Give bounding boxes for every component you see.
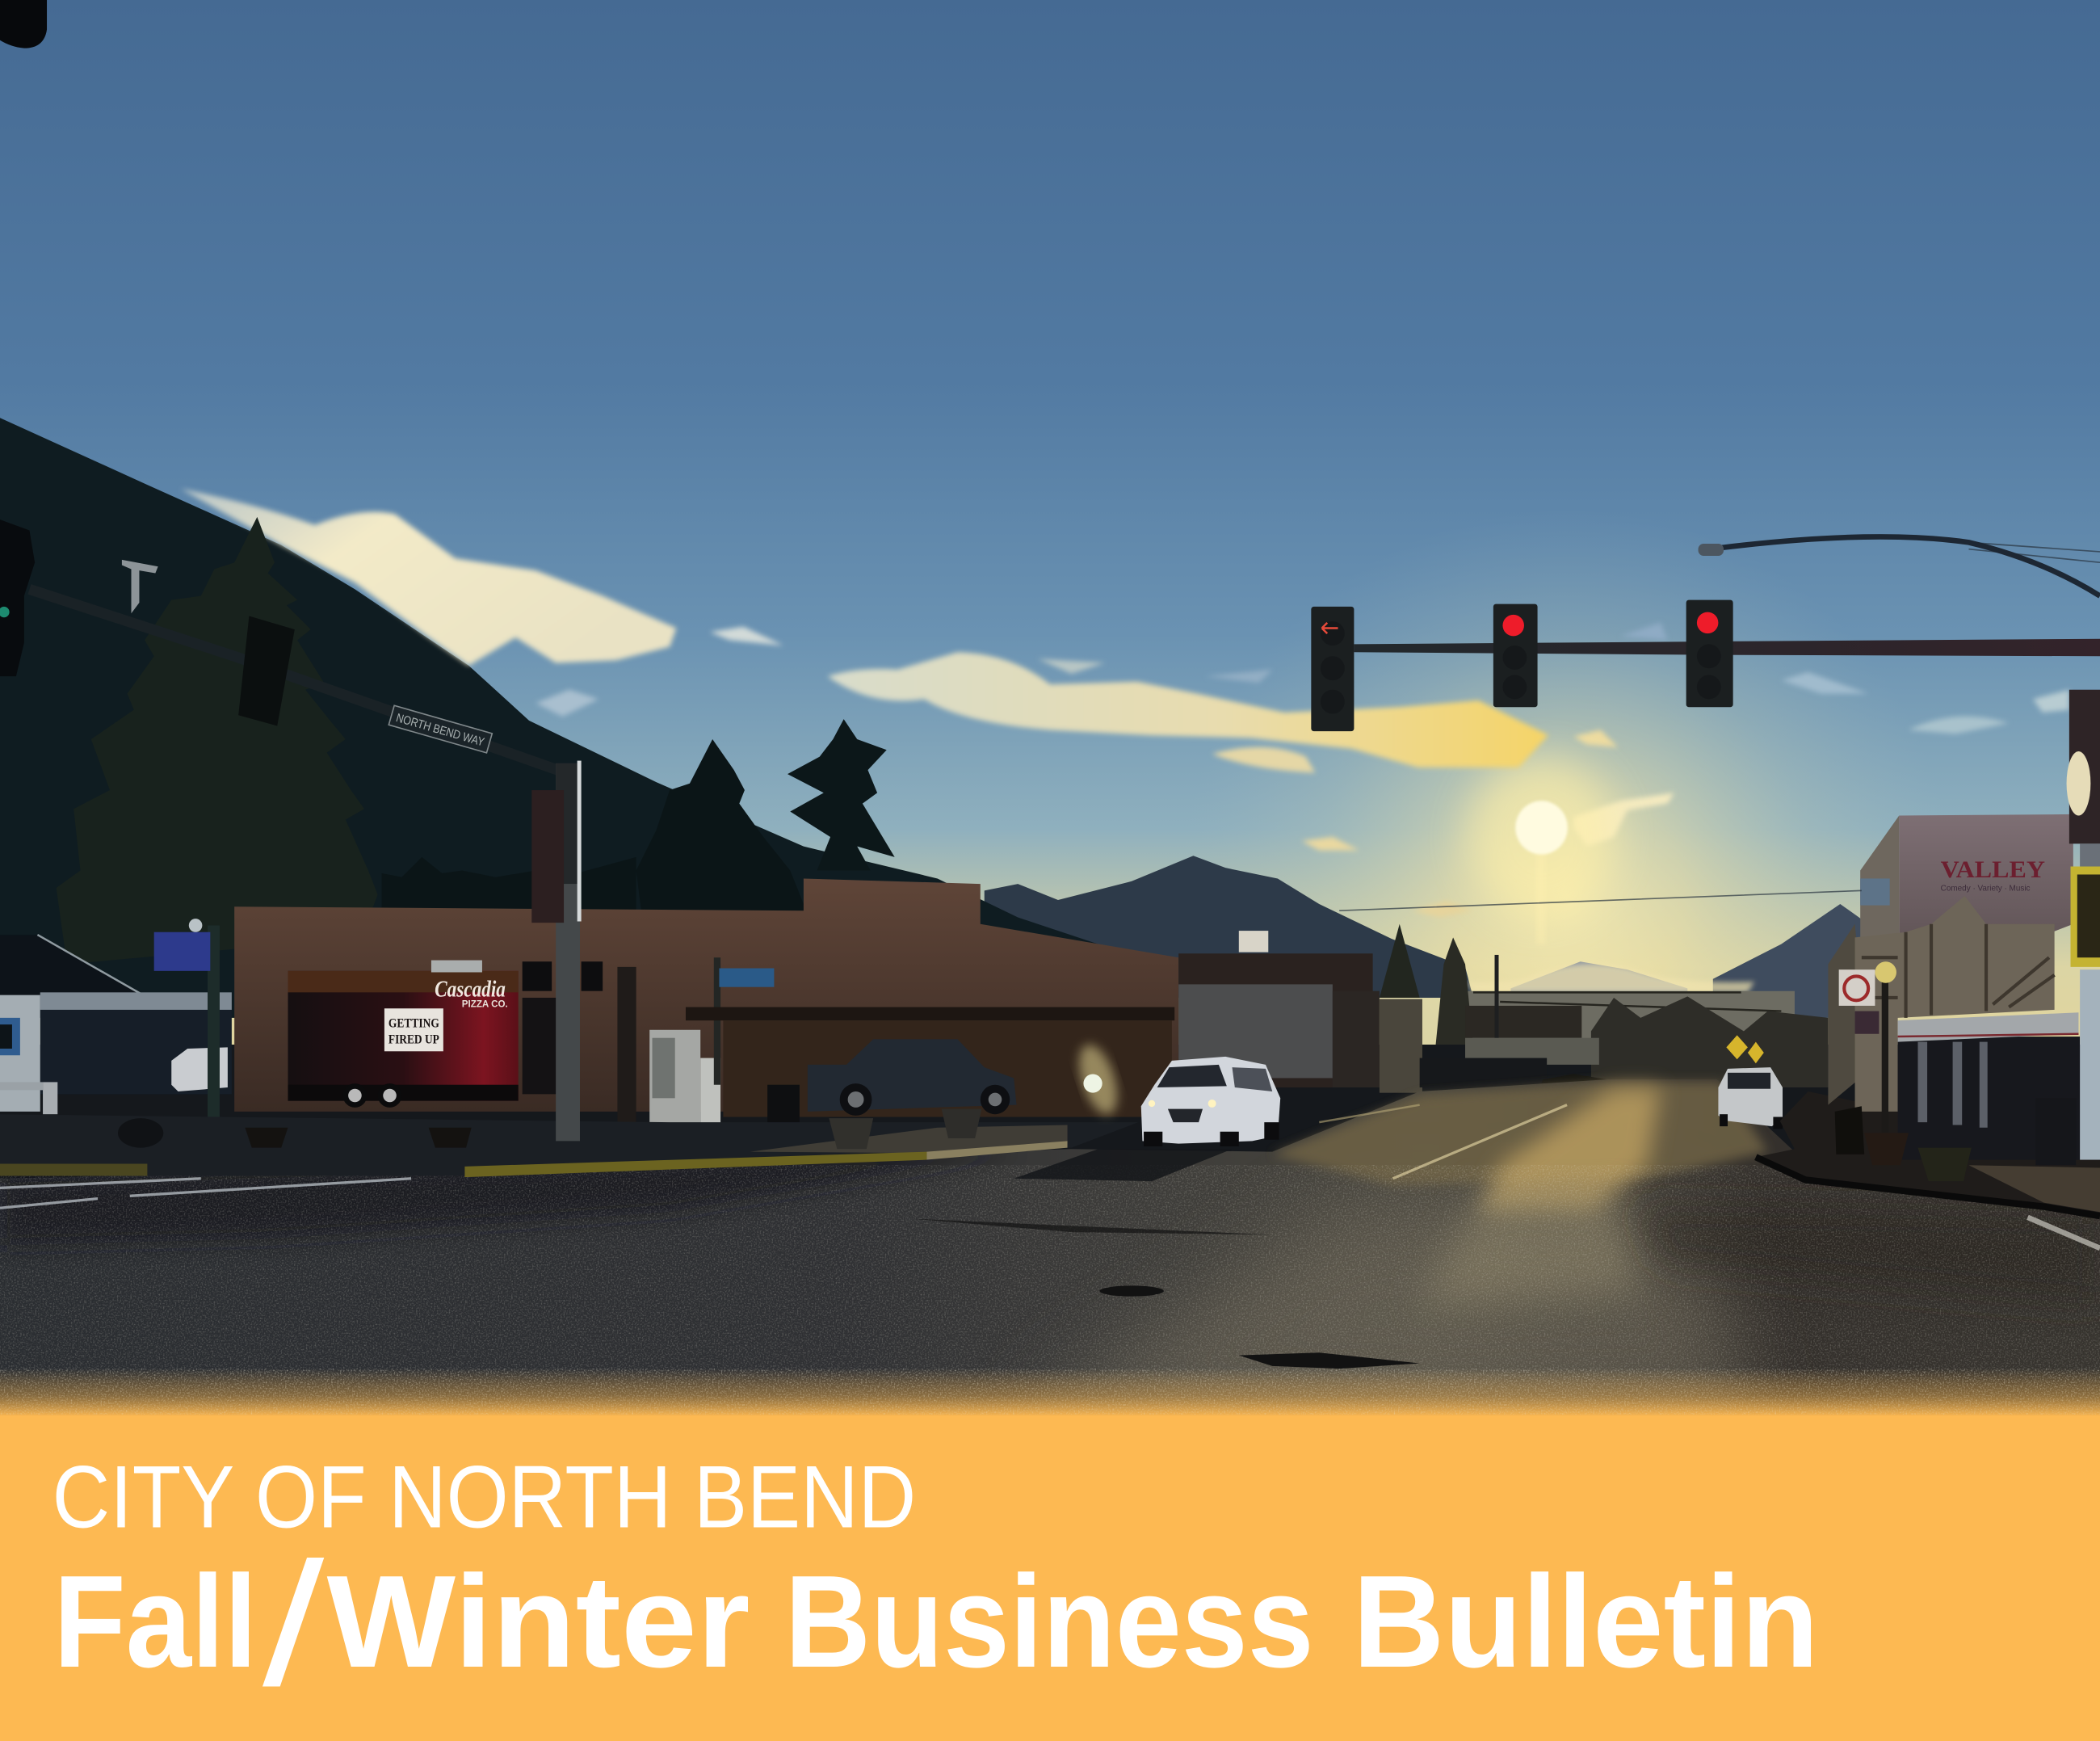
road cracks and patches: [911, 1149, 1420, 1369]
street light arm: [1699, 536, 2100, 596]
lens flare: [1072, 1040, 1124, 1119]
right side buildings: Valley Center: Comedy · Variety · Music: [1941, 884, 2031, 893]
small clouds: [536, 623, 2069, 918]
long cloud near traffic signals: [828, 652, 1548, 767]
wayfinding sign on left: [154, 919, 220, 1150]
sunlight reflection on road: [1018, 1082, 2100, 1419]
title: City of North Bend: CITY OF NORTH BEND: [52, 1449, 916, 1547]
title: Fall/Winter Business Bulletin: Fall: [53, 1549, 257, 1695]
traffic light: right red: [1686, 600, 1733, 707]
left signal arm and pole: [29, 560, 603, 1141]
food trailer: Cascadia Pizza Co.: [288, 961, 557, 1108]
title: Fall/Winter Business Bulletin: Bulletin: [1353, 1549, 1819, 1695]
left traffic lights: [0, 519, 295, 725]
buildings along left side of street: [1178, 924, 1581, 1093]
utility box and posts: [617, 957, 774, 1134]
title: Fall/Winter Business Bulletin: Winter: [327, 1549, 750, 1695]
title: Fall/Winter Business Bulletin: Business: [785, 1549, 1314, 1695]
sun: [1468, 757, 1615, 944]
title band: [0, 1415, 2100, 1741]
road grain texture: [0, 1165, 2100, 1415]
overhead wires: [1339, 542, 2100, 910]
right side buildings: Valley Center: [1828, 690, 2100, 1160]
food trailer: Cascadia Pizza Co.: Cascadia: [435, 977, 506, 1002]
far white car: [1718, 1067, 1783, 1129]
right side sidewalk: [1756, 1091, 2100, 1248]
traffic signal mast arm: [1354, 639, 2100, 656]
big mountain on the left: [0, 418, 1098, 1018]
sidewalk and curb at left corner: [0, 1114, 1138, 1208]
distant street with cars, trees and signs: [1420, 996, 1828, 1112]
food trailer: Cascadia Pizza Co.: FIRED UP: [388, 1032, 439, 1046]
fade from photo into title band: [0, 1369, 2100, 1417]
road surface: [0, 1079, 2100, 1419]
title: Fall/Winter Business Bulletin: /: [262, 1526, 325, 1722]
house and fence on the left: [0, 935, 232, 1114]
title: Fall/Winter Business Bulletin: [53, 1526, 1819, 1722]
icon: dark traffic light corner at top left: [0, 0, 47, 48]
trees behind buildings: [57, 517, 895, 965]
food trailer: Cascadia Pizza Co.: PIZZA CO.: [462, 999, 508, 1010]
cloud along the ridge: [181, 489, 676, 666]
sky background: [0, 0, 2100, 1285]
food trailer: Cascadia Pizza Co.: GETTING: [388, 1016, 439, 1030]
white SUV: [1141, 1057, 1280, 1146]
ground base under buildings: [0, 1045, 2100, 1192]
right side buildings: Valley Center: VALLEY: [1941, 856, 2045, 883]
street sign: North Bend Way: NORTH BEND WAY: [394, 711, 486, 750]
planters on sidewalk: [118, 1109, 981, 1149]
no-parking sign and street lamp: [1839, 961, 1896, 1138]
dark shaded left edge of road: [0, 1152, 1018, 1246]
traffic light: left arrow: [1311, 607, 1354, 731]
covered walkway with parked pickup: [686, 1007, 1174, 1138]
right side planters: [1835, 1098, 2076, 1181]
traffic light: middle red: [1493, 604, 1538, 707]
building: tan strip mall wall: [234, 878, 1178, 1112]
distant mountains: [985, 856, 1868, 1085]
